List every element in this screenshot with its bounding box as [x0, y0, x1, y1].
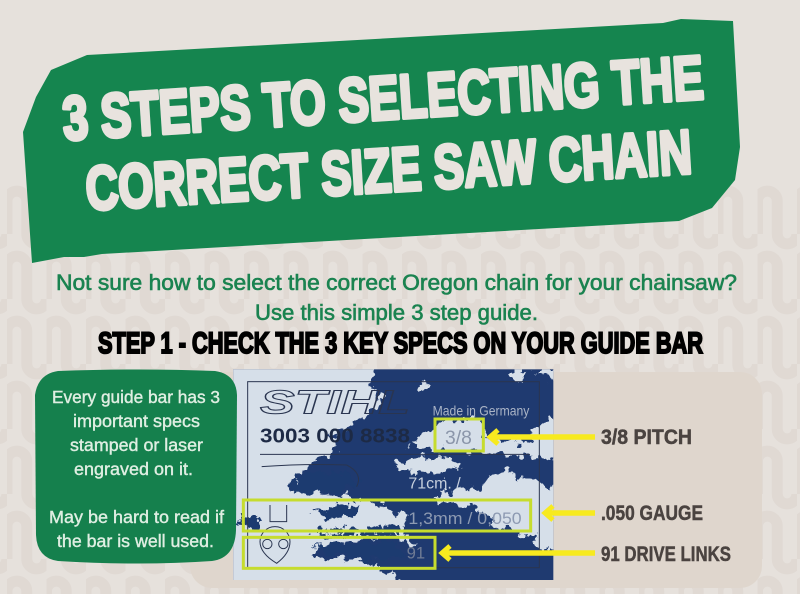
title banner: [23, 19, 740, 263]
intro text: [56, 270, 737, 325]
highlight boxes: [243, 419, 531, 568]
explanation text: stamped or laser: [70, 435, 203, 455]
explanation text: engraved on it.: [74, 459, 193, 479]
photo: guide bar stamp: 91: [407, 543, 425, 562]
explanation text: [49, 387, 224, 551]
arrow: gauge: [545, 506, 595, 520]
arrow: drive links: [442, 546, 595, 560]
panel: step 1 background: [190, 372, 762, 588]
explanation text: Every guide bar has 3: [52, 387, 220, 407]
spec labels: [601, 426, 731, 566]
spec labels: 91 DRIVE LINKS: [601, 543, 731, 566]
title: [60, 44, 706, 224]
spec labels: .050 GAUGE: [601, 502, 703, 525]
explanation text: important specs: [73, 411, 200, 431]
photo: guide bar stamp: 1,3mm / 0,050: [408, 509, 522, 528]
photo: guide bar stamp: STIHL: [260, 384, 410, 421]
intro text: Use this simple 3 step guide.: [255, 300, 538, 325]
explanation text: the bar is well used.: [57, 531, 214, 551]
arrow: pitch: [490, 430, 595, 444]
intro text: Not sure how to select the correct Oregon chain for your chainsaw?: [56, 270, 737, 295]
photo: guide bar stamp: 71cm. /: [408, 475, 461, 492]
photo: guide bar stamp: 3/8: [445, 428, 472, 449]
panel: guide bar explanation: [35, 370, 237, 564]
photo: guide bar stamp: [233, 369, 554, 580]
spec labels: 3/8 PITCH: [601, 426, 692, 449]
photo: guide bar stamp: 3003 000 8838: [260, 425, 410, 448]
photo: guide bar stamp: Made in Germany: [433, 403, 529, 419]
explanation text: May be hard to read if: [49, 507, 224, 527]
